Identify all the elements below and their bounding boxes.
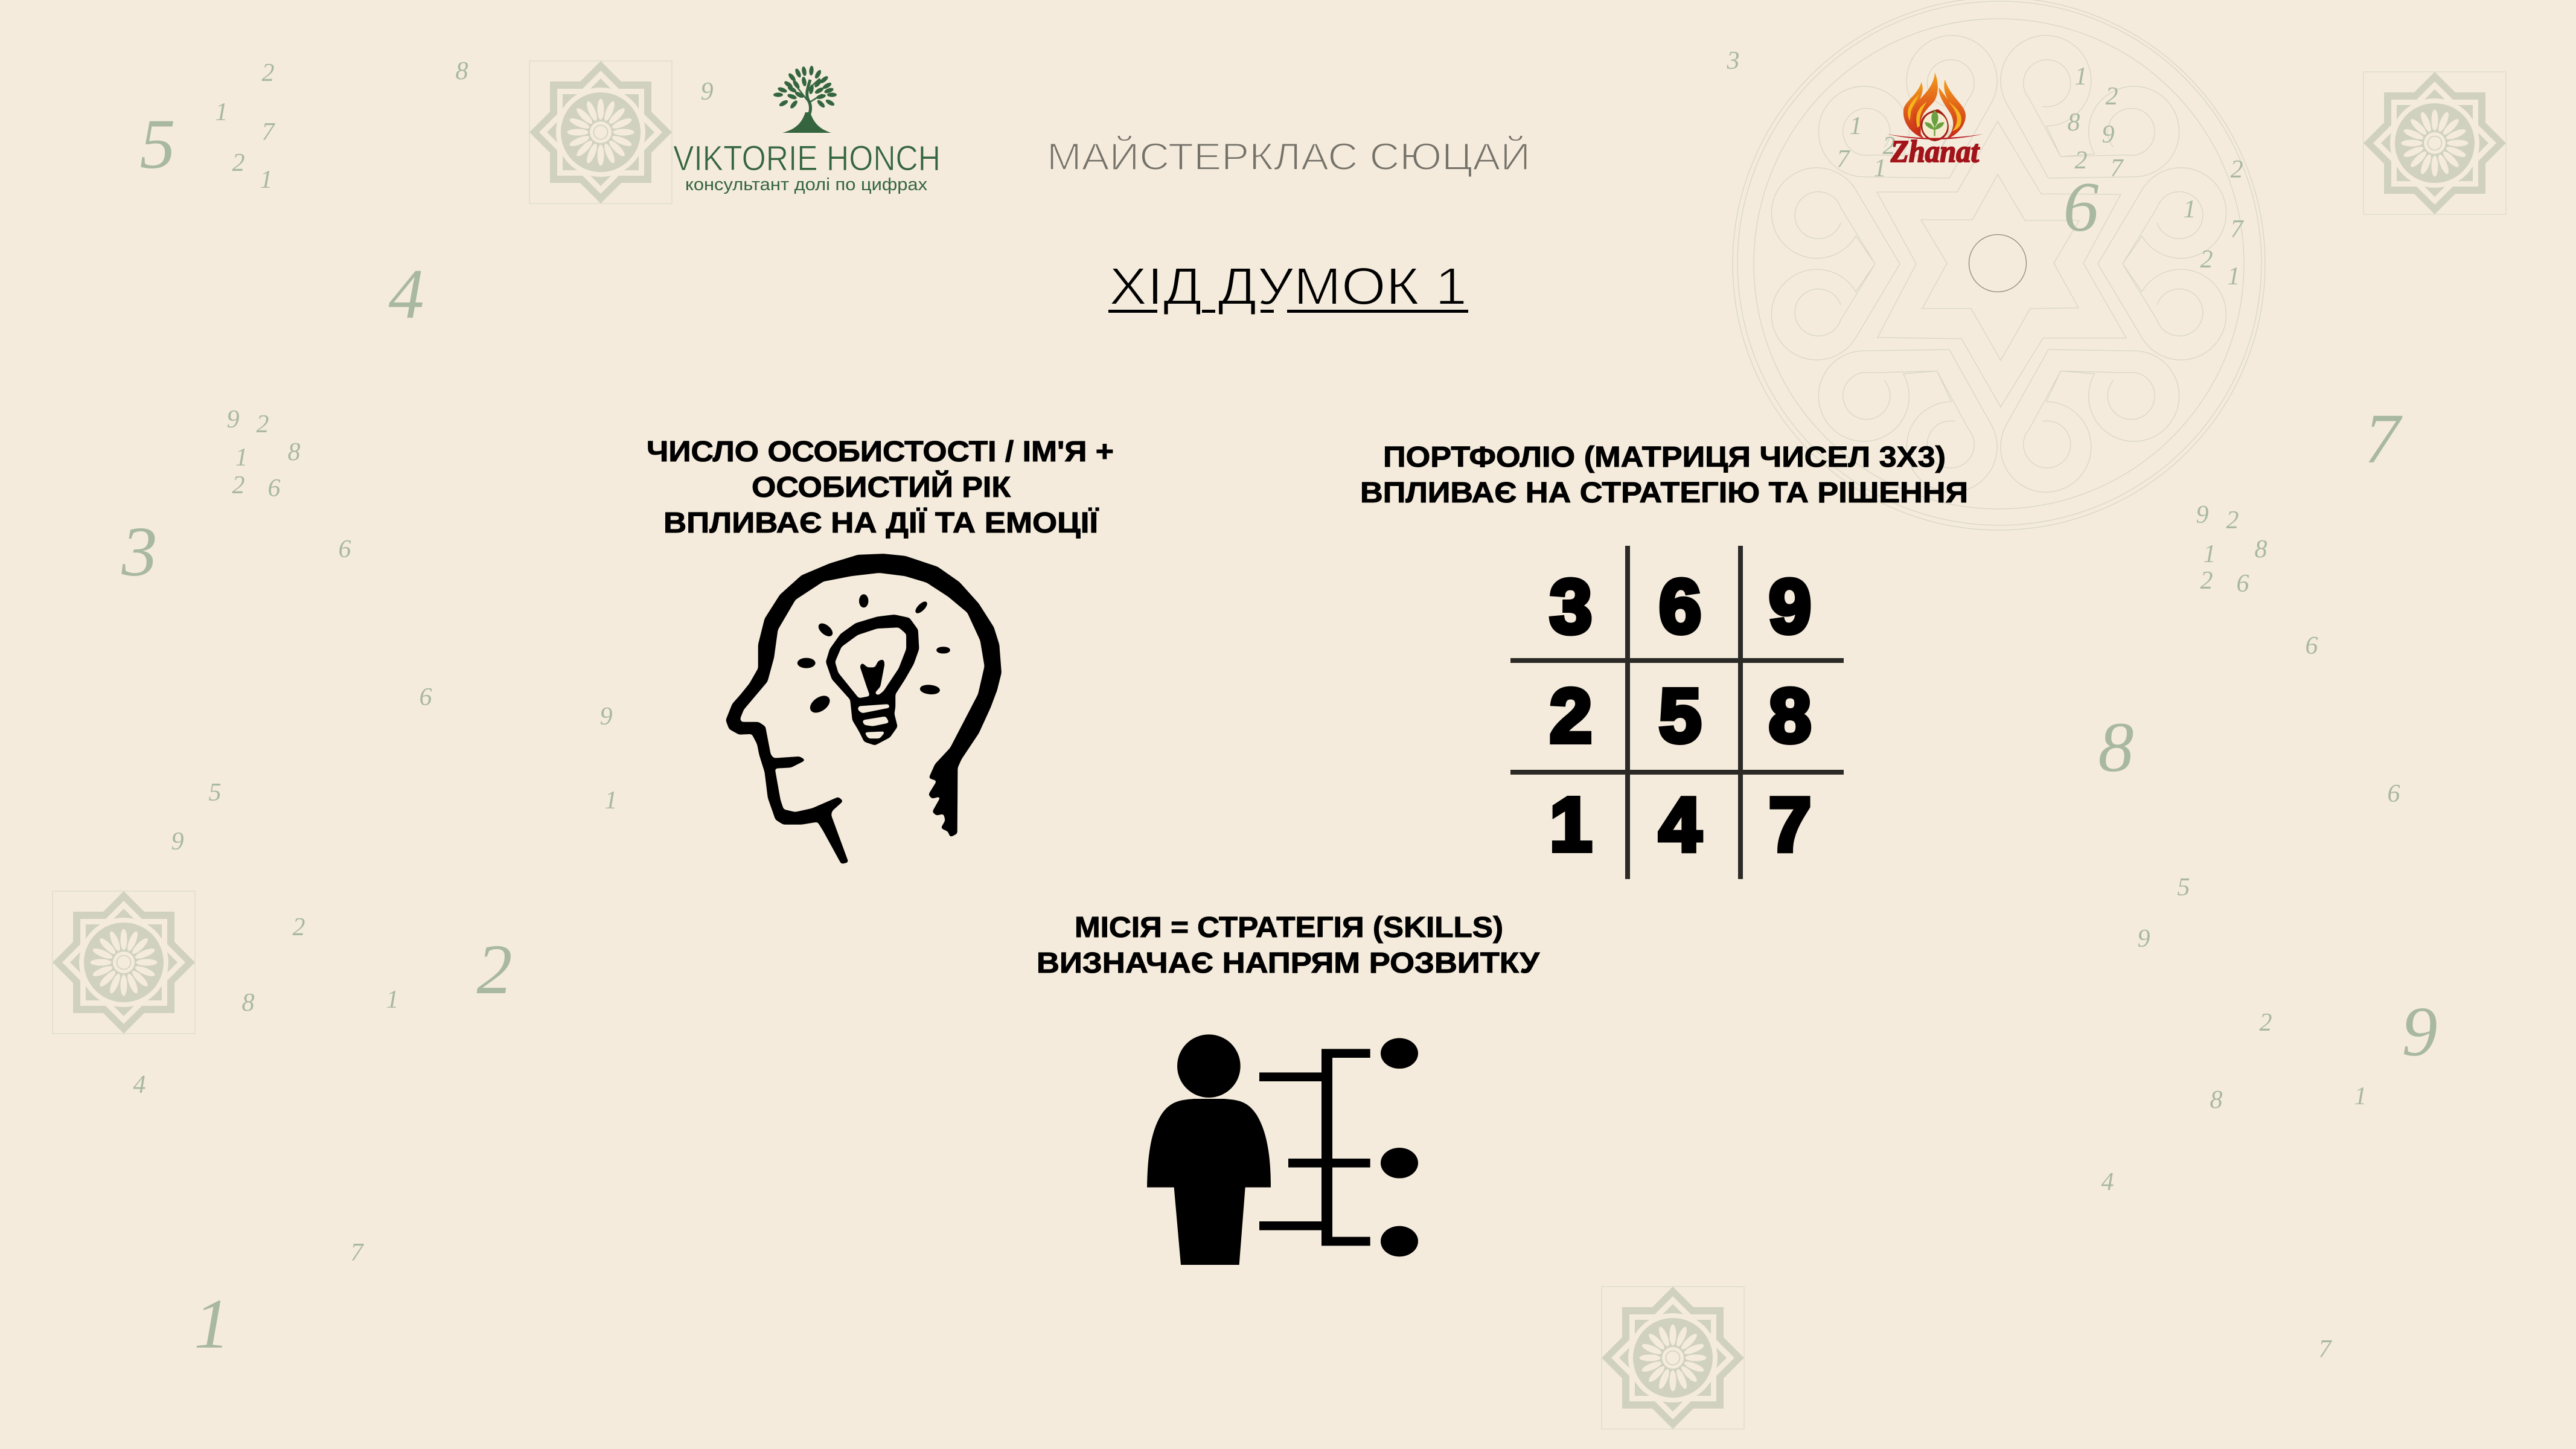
- person: [1147, 1034, 1271, 1265]
- small numerals: 9: [171, 828, 184, 856]
- matrix digits: 2: [1550, 673, 1592, 758]
- small numerals: 1: [1850, 112, 1862, 140]
- inner star: [1921, 174, 2079, 360]
- small numerals: 9: [700, 78, 714, 106]
- small numerals: 8: [2210, 1086, 2223, 1114]
- small numerals: 8: [455, 57, 468, 85]
- swoosh: [1887, 134, 1983, 139]
- large numerals: 4: [389, 254, 424, 333]
- small numerals: 3: [1727, 47, 1740, 75]
- small numerals: 9: [2196, 501, 2208, 529]
- skill dots: [1381, 1038, 1418, 1256]
- light bulb: [826, 615, 919, 746]
- decorative mandala outline: [1733, 0, 2265, 530]
- small numerals: 8: [241, 989, 255, 1017]
- small numerals: 5: [209, 779, 221, 807]
- ornament tile: left: [53, 891, 195, 1034]
- logo: Zhanat: [1887, 72, 1983, 169]
- small numerals: 2: [232, 149, 245, 177]
- small numerals: 1: [235, 444, 248, 472]
- logo: Viktorie Honch: [673, 66, 941, 194]
- large numerals: 7: [2364, 399, 2403, 478]
- small numerals: 2: [262, 59, 274, 87]
- small numerals: 7: [2318, 1335, 2333, 1363]
- large numerals: 5: [140, 104, 175, 184]
- text: portfolio: ВПЛИВАЄ НА СТРАТЕГІЮ ТА РІШЕННЯ: [1360, 477, 1968, 509]
- icon: head with light bulb: [726, 554, 1001, 863]
- large numerals: 6: [2063, 167, 2098, 246]
- small numerals: 2: [256, 411, 269, 438]
- large numerals: 2: [477, 930, 512, 1009]
- small numerals: 2: [2200, 246, 2213, 273]
- small numerals: 9: [227, 406, 239, 433]
- spiral loops: [1771, 19, 2226, 509]
- text: portfolio: ПОРТФОЛІО (МАТРИЦЯ ЧИСЕЛ 3X3): [1383, 441, 1946, 473]
- small numerals: 1: [215, 98, 228, 126]
- text: personal number: [647, 436, 1114, 539]
- small numerals: 1: [2183, 196, 2196, 223]
- small numerals: 4: [2101, 1168, 2114, 1196]
- text: mission: ВИЗНАЧАЄ НАПРЯМ РОЗВИТКУ: [1037, 947, 1540, 979]
- small numerals: 6: [338, 536, 351, 563]
- matrix digits: 8: [1769, 673, 1811, 758]
- small numerals: 8: [287, 438, 301, 466]
- small numerals: 2: [292, 913, 305, 941]
- ornament tile: bottom: [1602, 1287, 1744, 1429]
- text: mission: МІСІЯ = СТРАТЕГІЯ (SKILLS): [1075, 912, 1503, 944]
- small numerals: 2: [2106, 83, 2118, 110]
- small numerals: 4: [133, 1071, 146, 1099]
- small numerals: 6: [2305, 632, 2318, 660]
- grid lines: [1510, 546, 1844, 879]
- small numerals: 2: [1882, 132, 1896, 160]
- large numerals: 9: [2402, 992, 2438, 1071]
- small numerals: 2: [2200, 567, 2213, 595]
- brand name: VIKTORIE HONCH: [673, 139, 941, 178]
- masterclass heading: МАЙСТЕРКЛАС СЮЦАЙ: [1047, 135, 1530, 178]
- number matrix 3x3: [1510, 546, 1844, 879]
- large numerals: 3: [121, 512, 157, 591]
- small numerals: 7: [2230, 216, 2245, 243]
- small numerals: 2: [2230, 156, 2243, 184]
- small numerals: 1: [386, 986, 398, 1014]
- small numerals: 2: [2226, 507, 2239, 534]
- matrix digits: 7: [1769, 782, 1811, 867]
- icon: flame: [1903, 72, 1966, 141]
- small numerals: 8: [2254, 536, 2268, 563]
- ornament tile: top left: [529, 61, 672, 203]
- large numerals: 1: [194, 1284, 229, 1363]
- small numerals: 1: [2204, 540, 2216, 568]
- small numerals: 7: [350, 1239, 365, 1267]
- small numerals: 9: [2137, 925, 2150, 953]
- small numerals: 7: [1836, 146, 1851, 173]
- small numerals: 2: [2259, 1009, 2272, 1037]
- head outline: [726, 554, 1001, 863]
- small numerals: 9: [600, 703, 612, 731]
- brand name: Zhanat: [1890, 135, 1980, 169]
- small numerals: [133, 47, 2400, 1363]
- small numerals: 7: [2111, 155, 2124, 182]
- matrix digits: 4: [1659, 782, 1701, 867]
- matrix digits: 1: [1550, 782, 1592, 867]
- small numerals: 1: [2074, 63, 2088, 91]
- small numerals: 6: [2236, 570, 2249, 598]
- small numerals: 1: [1874, 155, 1886, 182]
- large numerals: 8: [2098, 708, 2133, 787]
- small numerals: 2: [232, 472, 245, 499]
- ornament tile: top right: [2363, 72, 2506, 214]
- matrix digits: 5: [1659, 673, 1701, 758]
- text: personal number: ОСОБИСТИЙ РІК: [752, 470, 1011, 504]
- small numerals: 7: [262, 118, 275, 146]
- small numerals: 1: [260, 166, 273, 194]
- matrix digits: 3: [1550, 564, 1592, 649]
- small numerals: 5: [2177, 874, 2190, 901]
- matrix digits: 6: [1659, 564, 1701, 649]
- icon: person with branching skills: [1147, 1034, 1418, 1265]
- title: ХІД ДУМОК 1: [1109, 257, 1467, 316]
- small numerals: 6: [419, 683, 432, 711]
- branching connector: [1259, 1049, 1370, 1246]
- small numerals: 1: [2228, 263, 2240, 290]
- small numerals: 1: [2354, 1083, 2367, 1110]
- icon: tree: [773, 66, 837, 133]
- small numerals: 6: [268, 475, 280, 502]
- text: personal number: ВПЛИВАЄ НА ДІЇ ТА ЕМОЦІЇ: [663, 507, 1099, 539]
- text: portfolio: [1360, 441, 1968, 509]
- small numerals: 2: [2074, 147, 2088, 174]
- matrix digits: 9: [1769, 564, 1811, 649]
- outer star: [1877, 121, 2126, 407]
- text: mission: [1037, 912, 1540, 979]
- small numerals: 1: [605, 787, 617, 814]
- center circle: [1969, 234, 2026, 292]
- text: personal number: ЧИСЛО ОСОБИСТОСТІ / ІМ'Я +: [647, 436, 1114, 468]
- small numerals: 8: [2067, 109, 2080, 136]
- small numerals: 6: [2387, 780, 2400, 808]
- brand tagline: консультант долі по цифрах: [685, 175, 928, 194]
- matrix digits: [1550, 564, 1811, 867]
- light rays: [797, 594, 951, 716]
- large numerals: [121, 104, 2438, 1363]
- small numerals: 9: [2102, 121, 2114, 149]
